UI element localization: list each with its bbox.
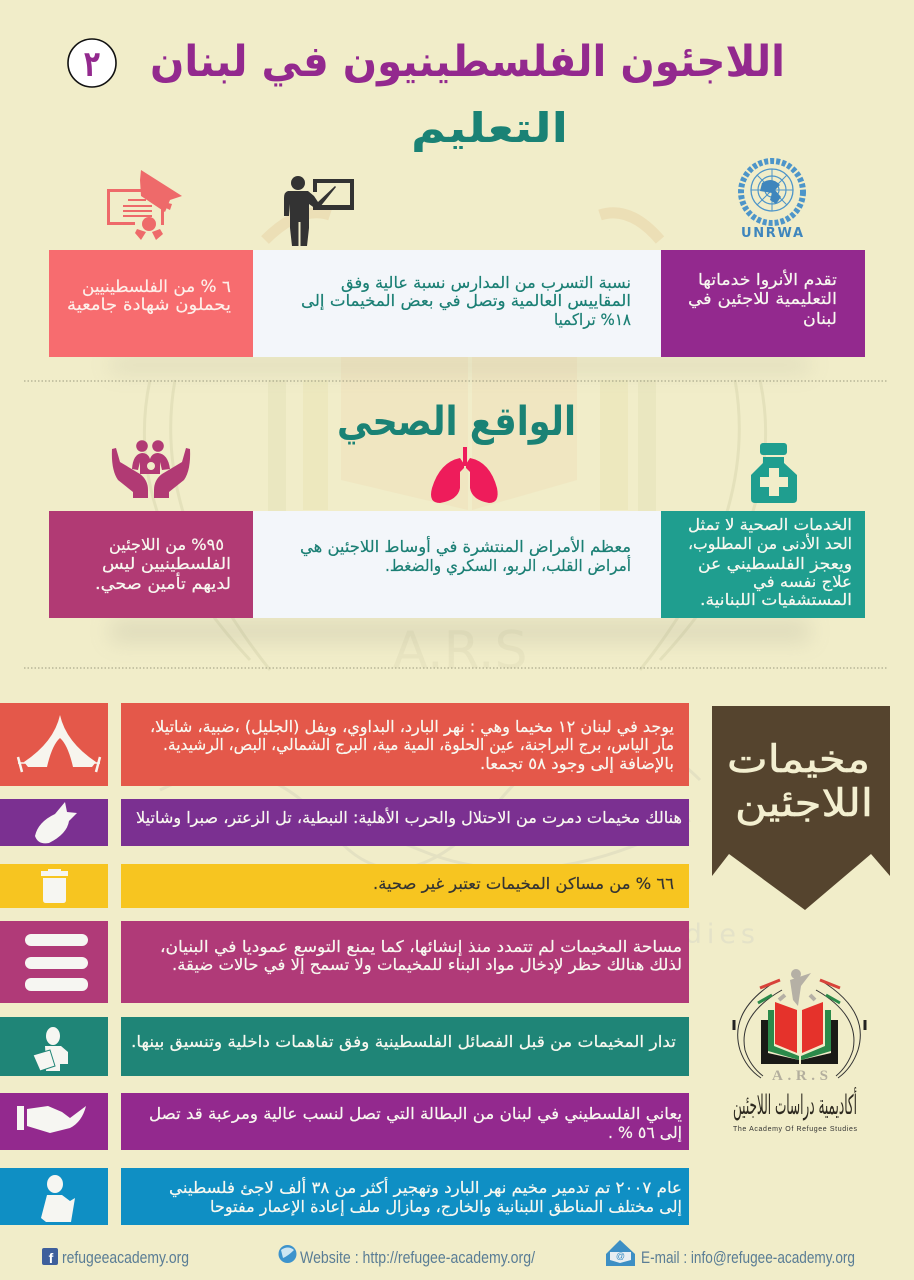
- heading: health: الواقع الصحي: [337, 399, 576, 445]
- panel: health services: ويعجز الفلسطيني عن: [698, 554, 852, 574]
- icon: UNRWA logo: [741, 161, 803, 241]
- icon: UNRWA logo: UNRWA: [741, 226, 803, 241]
- panel: health insurance stat: ٩٥% من اللاجئين: [109, 535, 224, 555]
- footer: email: @: [616, 1251, 625, 1261]
- row: Nahr al-Bared: عام ٢٠٠٧ تم تدمير مخيم نهر البارد وتهجير أكثر من ٣٨ ألف لاجئ فلسطيني: [169, 1177, 682, 1198]
- panel: health services: المستشفيات اللبنانية.: [700, 590, 852, 609]
- footer: facebook: refugeeacademy.org: [62, 1248, 189, 1267]
- row: Nahr al-Bared: إلى مختلف المناطق اللبنانية والخارج، ومازال ملف إعادة الإعمار مفتوحا: [210, 1197, 682, 1217]
- row: unemployment: [0, 1093, 689, 1150]
- panel: health services: الحد الأدنى من المطلوب،: [688, 533, 852, 554]
- footer: email: E-mail : info@refugee-academy.org: [641, 1248, 855, 1267]
- panel shadows: [110, 358, 810, 642]
- footer: website: Website : http://refugee-academy.org/: [300, 1248, 535, 1267]
- row: camps list: مار الياس، برج البراجنة، عين الحلوة، المية مية، البرج الشمالي، البص، الرشيدية.: [163, 735, 674, 755]
- row: Nahr al-Bared: [0, 1168, 689, 1225]
- panel: health services: [661, 511, 865, 618]
- row: unhealthy housing: ٦٦ % من مساكن المخيمات تعتبر غير صحية.: [373, 874, 674, 894]
- row: unhealthy housing: [0, 864, 689, 908]
- panel: school dropout: نسبة التسرب من المدارس نسبة عالية وفق: [341, 273, 631, 293]
- panel: UNRWA services: لبنان: [803, 309, 837, 328]
- logo: Academy of Refugee Studies: The Academy Of Refugee Studies: [733, 1126, 858, 1133]
- icon: person: [41, 1175, 75, 1222]
- part number badge: ٢: [84, 44, 100, 85]
- panel: UNRWA services: التعليمية للاجئين في: [688, 289, 837, 309]
- panel: health services: الخدمات الصحية لا تمثل: [688, 515, 852, 534]
- panel: UNRWA services: [661, 250, 865, 357]
- background watermark: A.R.S: [392, 621, 528, 681]
- panel: UNRWA services: تقدم الأنروا خدماتها: [698, 269, 837, 290]
- icon: medicine bottle: [751, 443, 797, 503]
- icon: stacked bars: [25, 934, 88, 991]
- panel: health insurance stat: [49, 511, 253, 618]
- row: camps list: يوجد في لبنان ١٢ مخيما وهي : نهر البارد، البداوي، ويفل (الجليل) ،ضبية، شاتيلا،: [150, 717, 674, 737]
- title: اللاجئون الفلسطينيون في لبنان: [150, 37, 785, 87]
- icon: hands holding family: [112, 440, 190, 498]
- icon: person with jobs sheet: [33, 1027, 68, 1071]
- icon: trash can: [41, 869, 68, 903]
- banner: refugee camps: مخيمات: [727, 737, 870, 781]
- banner: refugee camps: اللاجئين: [735, 781, 873, 826]
- background watermark: [144, 213, 766, 950]
- panel: education degree stat: يحملون شهادة جامعية: [67, 295, 231, 315]
- part number badge: [68, 39, 116, 87]
- icon: certificate and graduation cap: [107, 170, 182, 240]
- panel: education degree stat: [49, 250, 253, 357]
- panel: education degree stat: ٦ % من الفلسطينيين: [82, 277, 231, 296]
- panel: common diseases: معظم الأمراض المنتشرة في أوساط اللاجئين هي: [300, 536, 631, 557]
- icon: teacher at board: [284, 176, 354, 246]
- footer: facebook: f: [49, 1250, 54, 1266]
- icon: open hand: [17, 1106, 86, 1133]
- logo: Academy of Refugee Studies: A.R.S: [772, 1068, 828, 1084]
- panel: school dropout: المقاييس العالمية وتصل في بعض المخيمات إلى: [301, 291, 631, 311]
- logo: Academy of Refugee Studies: [733, 969, 865, 1133]
- row: camp management: [0, 1017, 689, 1076]
- row: unemployment: يعاني الفلسطيني في لبنان من البطالة التي تصل لنسب عالية ومرعبة قد تصل: [149, 1104, 682, 1124]
- row: camp area: [0, 921, 689, 1003]
- icon: lungs: [431, 447, 498, 503]
- heading: education: التعليم: [411, 104, 568, 152]
- panel: health insurance stat: لديهم تأمين صحي.: [95, 572, 231, 594]
- row: camp area: مساحة المخيمات لم تتمدد منذ إنشائها، كما يمنع التوسع عموديا في البنيان،: [160, 937, 682, 957]
- panel: health services: علاج نفسه في: [753, 572, 852, 592]
- panel: school dropout: [253, 250, 661, 357]
- row: destroyed camps: هنالك مخيمات دمرت من الاحتلال والحرب الأهلية: النبطية، تل الزعتر، صبرا وشاتيلا: [136, 807, 682, 828]
- row: camp area: لذلك هنالك حظر لإدخال مواد البناء للمخيمات ولا تسمح إلا في حالات ضيقة.: [172, 955, 682, 975]
- panel: health insurance stat: الفلسطينيين ليس: [102, 554, 231, 574]
- icon: tent: [18, 715, 100, 772]
- icon: bomb: [35, 802, 77, 843]
- row: destroyed camps: [0, 799, 689, 846]
- banner: refugee camps: [712, 706, 890, 910]
- row: camps list: [0, 703, 689, 786]
- panel: common diseases: أمراض القلب، الربو، السكري والضغط.: [385, 555, 631, 576]
- panel: common diseases: [253, 511, 661, 618]
- row: camp management: تدار المخيمات من قبل الفصائل الفلسطينية وفق تفاهمات داخلية وتنسيق بينها.: [131, 1032, 676, 1052]
- panel: school dropout: ١٨% تراكميا: [554, 310, 631, 330]
- footer: website: [278, 1245, 535, 1267]
- footer: email: [606, 1240, 855, 1267]
- background watermark: Studies: [625, 919, 755, 950]
- row: unemployment: إلى ٥٦ % .: [608, 1123, 682, 1142]
- row: camps list: بالإضافة إلى وجود ٥٨ تجمعا.: [480, 754, 674, 774]
